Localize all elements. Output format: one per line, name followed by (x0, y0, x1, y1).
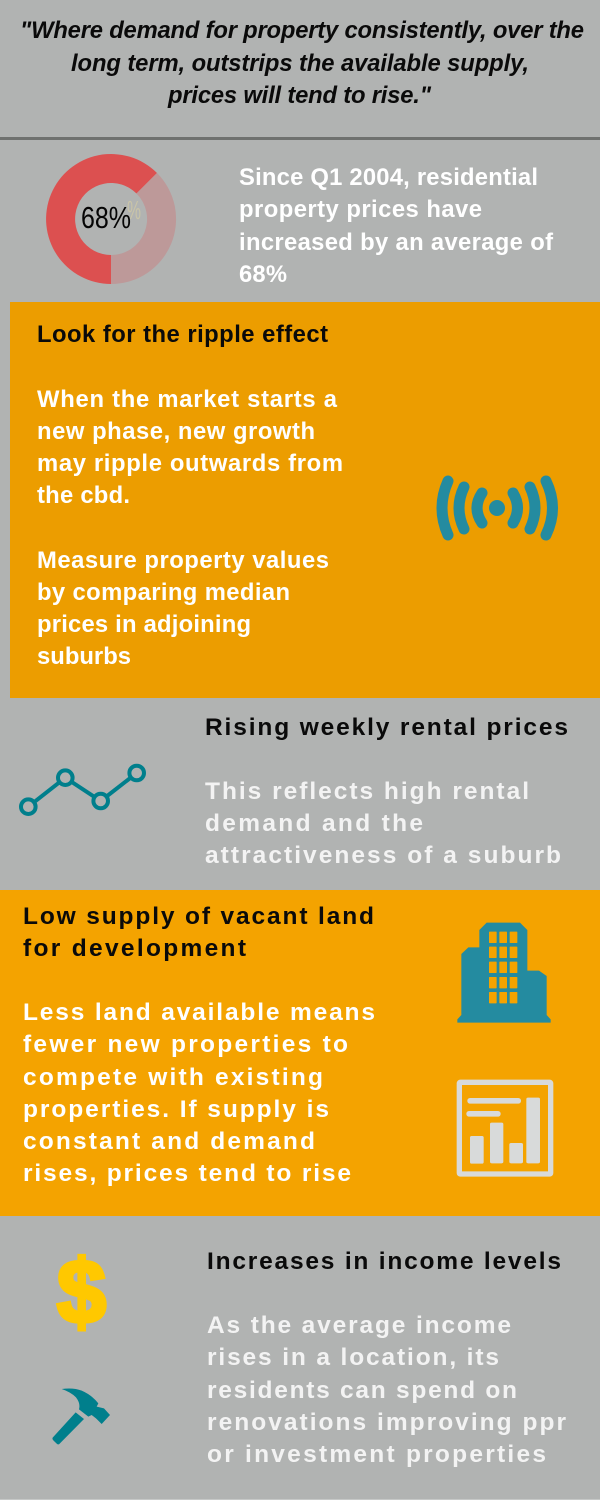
rental prices text: attractiveness of a suburb (205, 842, 561, 869)
ripple effect text: may ripple outwards from (37, 450, 343, 477)
ripple effect text: Measure property values (37, 547, 329, 574)
ripple effect text: by comparing median (37, 579, 290, 606)
icon: dollar sign: $ (57, 1243, 106, 1343)
title quote: "Where demand for property consistently, over the (20, 17, 584, 44)
panel: income levels (52, 1243, 566, 1468)
statistic text: Since Q1 2004, residential (239, 164, 538, 191)
heading: rental prices: Rising weekly rental prices (205, 714, 568, 741)
statistic text: property prices have (239, 196, 482, 223)
panel: vacant land (0, 890, 600, 1216)
ripple effect text: suburbs (37, 643, 131, 670)
vacant land text: properties. If supply is (23, 1096, 329, 1123)
ripple effect text: prices in adjoining (37, 611, 251, 638)
donut chart: 68% (46, 154, 176, 284)
ripple effect text: new phase, new growth (37, 418, 315, 445)
income levels text: residents can spend on (207, 1377, 517, 1404)
icon: hammer (52, 1388, 110, 1444)
icon: framed bar chart (459, 1082, 551, 1174)
statistic text: 68% (239, 261, 287, 288)
panel: ripple effect (10, 302, 600, 698)
heading: income levels: Increases in income levels (207, 1248, 561, 1275)
rental prices text: This reflects high rental (205, 778, 529, 805)
vacant land text: compete with existing (23, 1064, 323, 1091)
income levels text: rises in a location, its (207, 1344, 499, 1371)
heading: ripple effect: Look for the ripple effect (37, 321, 328, 348)
title quote: prices will tend to rise." (167, 82, 432, 109)
panel: rental prices (21, 714, 568, 869)
icon: broadcast signal (442, 481, 552, 535)
icon: office building (457, 923, 551, 1023)
donut chart: 68%: % (127, 195, 141, 225)
income levels text: As the average income (207, 1312, 511, 1339)
income levels text: renovations improving ppr (207, 1409, 566, 1436)
rental prices text: demand and the (205, 810, 423, 837)
heading: vacant land (23, 903, 374, 962)
icon: rising line chart (21, 766, 144, 814)
vacant land text: rises, prices tend to rise (23, 1160, 351, 1187)
ripple effect text: the cbd. (37, 482, 130, 509)
title quote (20, 17, 584, 109)
vacant land text: constant and demand (23, 1128, 315, 1155)
ripple effect text (37, 386, 343, 670)
title quote: long term, outstrips the available supply, (71, 50, 529, 77)
vacant land text (23, 999, 375, 1187)
income levels text (207, 1312, 566, 1468)
vacant land text: Less land available means (23, 999, 375, 1026)
panel: 68% statistic (46, 154, 553, 288)
heading: vacant land: for development (23, 935, 246, 962)
rental prices text (205, 778, 561, 869)
vacant land text: fewer new properties to (23, 1031, 348, 1058)
statistic text (239, 164, 553, 288)
ripple effect text: When the market starts a (37, 386, 338, 413)
income levels text: or investment properties (207, 1441, 546, 1468)
heading: vacant land: Low supply of vacant land (23, 903, 374, 930)
donut chart: 68%: 68% (81, 200, 131, 235)
statistic text: increased by an average of (239, 229, 553, 256)
